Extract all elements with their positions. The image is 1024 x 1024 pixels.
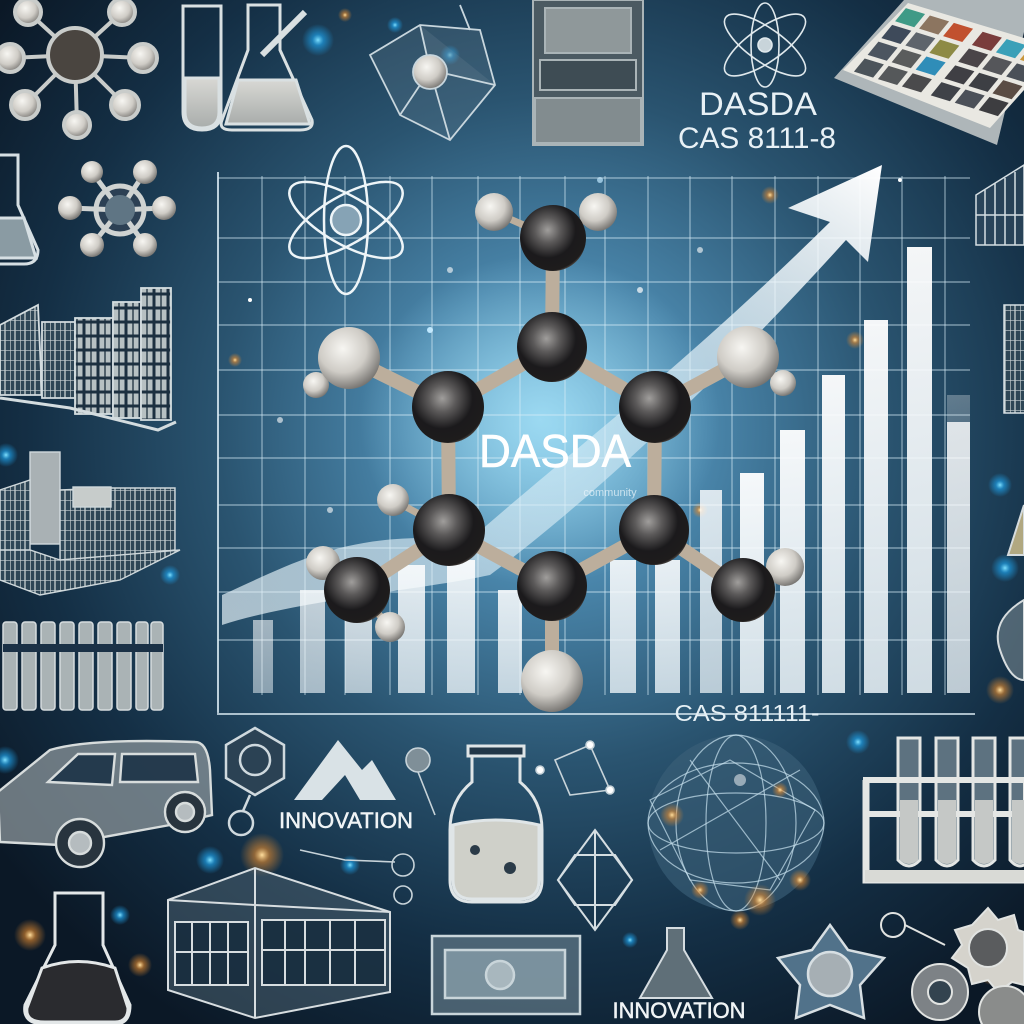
- icon: globe: [648, 735, 824, 916]
- icon: machine top: [533, 0, 643, 145]
- icon: glass device: [432, 936, 580, 1014]
- molecule bonds: [316, 212, 785, 681]
- dark atoms: [324, 205, 775, 623]
- icon: star molecule: [778, 925, 884, 1018]
- innovation logo left: [279, 740, 413, 833]
- chart: [218, 165, 975, 726]
- molecule: [303, 193, 804, 712]
- icon: equipment right: [1004, 305, 1024, 413]
- icon: network small: [300, 741, 614, 904]
- center label: DASDA: [479, 425, 631, 477]
- icon: atom top: [716, 3, 814, 87]
- icon: gears: [881, 908, 1024, 1024]
- growth arrow: [222, 165, 882, 625]
- icon: flask peak: [640, 928, 712, 998]
- title top right: DASDA: [699, 86, 818, 122]
- icon: bottle: [450, 746, 542, 902]
- light atoms: [303, 193, 804, 712]
- icon: hexagon network: [558, 830, 632, 930]
- icon: building right: [976, 165, 1024, 245]
- atom icon center: [279, 146, 413, 294]
- label: INNOVATION: [612, 998, 746, 1023]
- icon: test tube rack: [865, 738, 1024, 882]
- bars: [253, 247, 970, 693]
- icon: right flask: [998, 505, 1024, 680]
- icon: molecule top left: [0, 0, 157, 138]
- icon: flask left: [0, 155, 38, 264]
- icon: test tubes left: [3, 622, 163, 710]
- icon: peaks: [294, 740, 396, 800]
- icon: periodic tablet: [834, 0, 1024, 145]
- icon: molecule left: [58, 160, 176, 257]
- title top right: CAS 8111-8: [678, 122, 836, 155]
- title top right: [678, 86, 836, 155]
- label: INNOVATION: [279, 808, 413, 833]
- icon: flasks top: [183, 5, 312, 130]
- icon: building bottom: [168, 868, 390, 1018]
- axis label: CAS 811111-: [674, 700, 820, 726]
- icon: crystal molecule top: [370, 5, 495, 140]
- innovation logo bottom: [612, 928, 746, 1023]
- icon: gear badge: [226, 728, 284, 835]
- icon: factory left lower: [0, 452, 180, 595]
- chart grid: [218, 172, 970, 712]
- icon: factory left upper: [0, 288, 176, 430]
- small caption: community: [583, 487, 637, 499]
- chart axes: [218, 172, 975, 714]
- icon: van: [0, 741, 212, 867]
- tablet cards: [854, 8, 1024, 116]
- icon: flask bottom left: [25, 893, 130, 1024]
